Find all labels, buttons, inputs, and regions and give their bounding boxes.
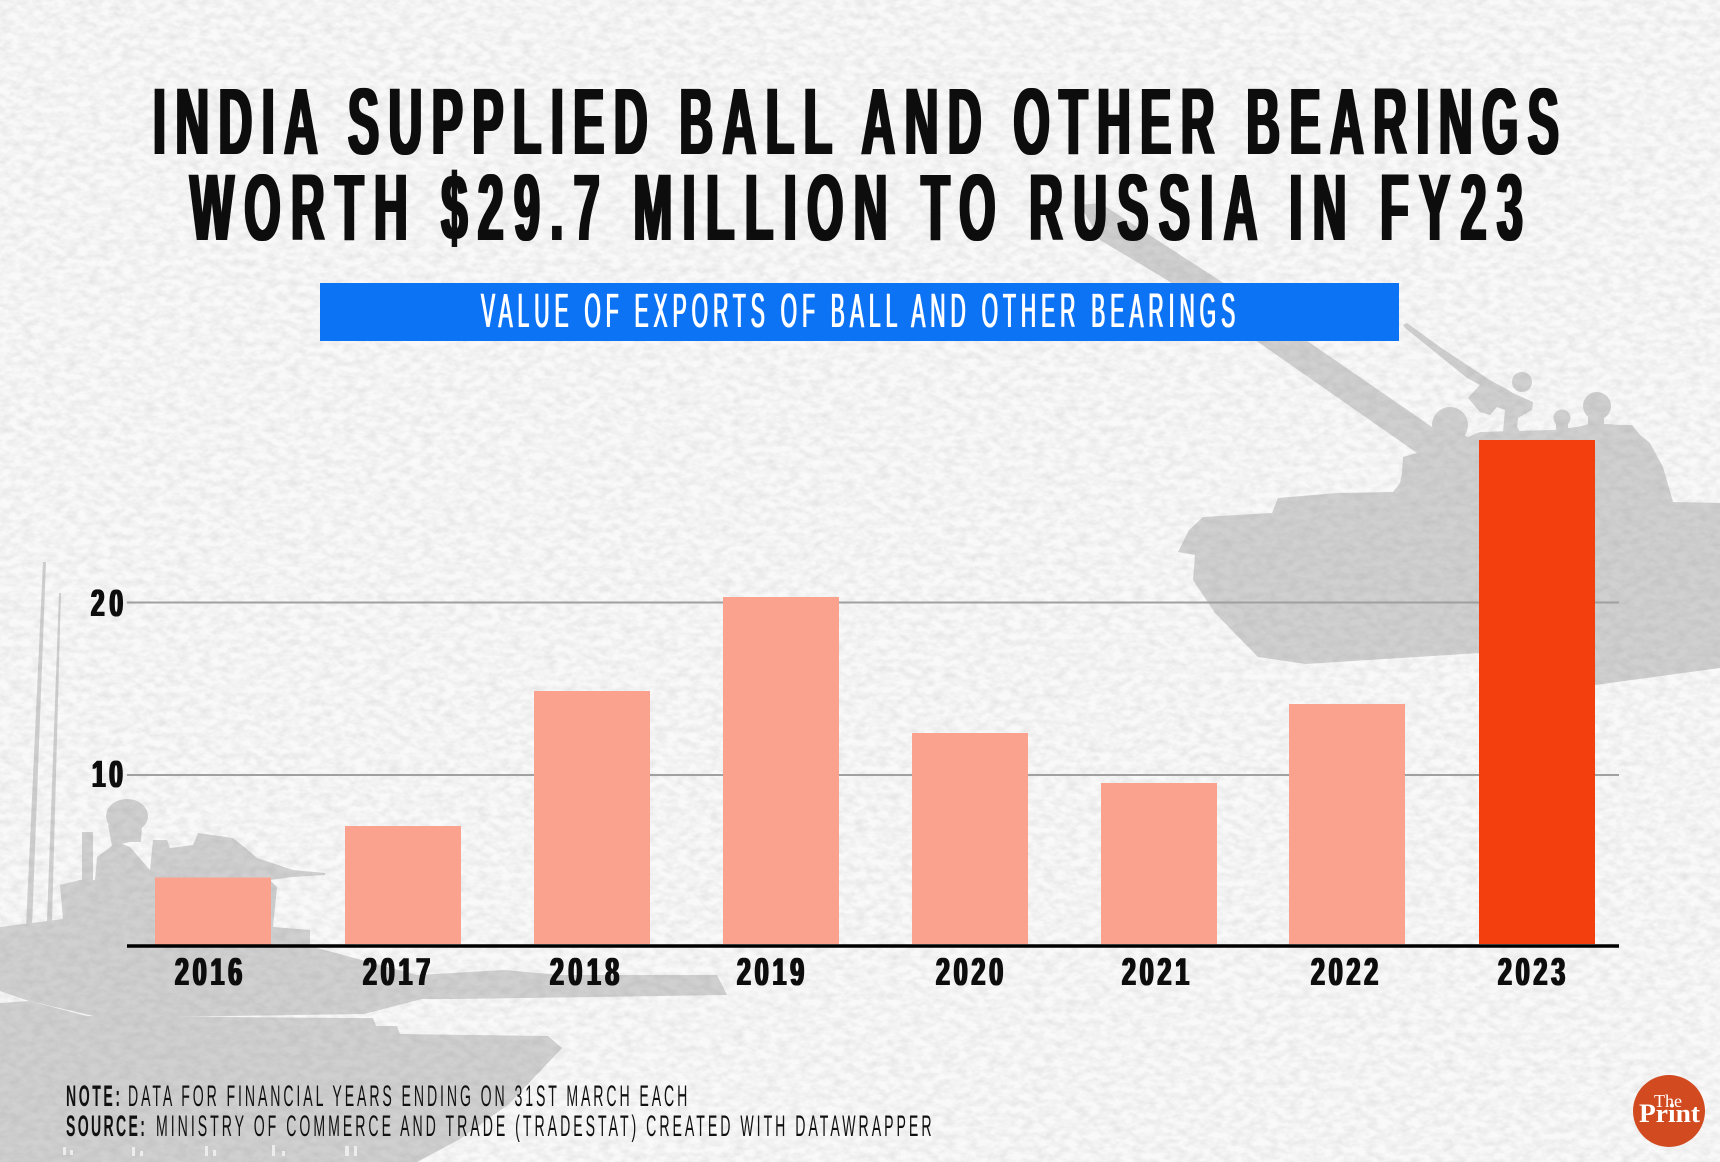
y-axis gridlines	[127, 602, 1619, 775]
x-axis year labels: 2023	[1498, 949, 1565, 993]
title: WORTH $29.7 MILLION TO RUSSIA IN FY23	[190, 154, 1523, 260]
y-axis labels: 10	[92, 752, 123, 795]
subtitle banner: VALUE OF EXPORTS OF BALL AND OTHER BEARINGS	[481, 283, 1235, 337]
x-axis year labels: 2020	[936, 949, 1003, 993]
footnote: note and source: DATA FOR FINANCIAL YEARS ENDING ON 31ST MARCH EACH	[128, 1079, 687, 1112]
bar chart	[91, 440, 1619, 993]
footnote: note and source: NOTE:	[66, 1079, 120, 1112]
x-axis year labels: 2017	[363, 949, 430, 993]
y-axis labels: 20	[91, 581, 123, 624]
subtitle banner	[320, 283, 1399, 341]
x-axis year labels: 2022	[1311, 949, 1378, 993]
x-axis year labels: 2019	[737, 949, 804, 993]
bars	[155, 440, 1595, 944]
x-axis line	[127, 944, 1619, 948]
decorative tread marks	[63, 1145, 357, 1156]
footnote: note and source: MINISTRY OF COMMERCE AND TRADE (TRADESTAT) CREATED WITH DATAWRAPPER	[156, 1109, 932, 1142]
x-axis year labels: 2016	[175, 949, 242, 993]
x-axis year labels: 2021	[1122, 949, 1189, 993]
footnote: note and source	[66, 1079, 932, 1142]
logo: The Print	[1633, 1075, 1705, 1147]
logo: The Print: Print	[1639, 1099, 1700, 1128]
title: INDIA SUPPLIED BALL AND OTHER BEARINGS	[153, 68, 1559, 174]
background silhouette: tank with long barrel, right	[1080, 203, 1720, 685]
y-axis labels	[91, 581, 123, 795]
x-axis year labels: 2018	[550, 949, 619, 993]
background silhouette: soldier and tanks, left	[0, 562, 727, 1162]
title	[153, 68, 1559, 260]
x-axis year labels	[175, 949, 1565, 993]
footnote: note and source: SOURCE:	[66, 1109, 145, 1142]
logo: The Print: The	[1654, 1091, 1682, 1111]
